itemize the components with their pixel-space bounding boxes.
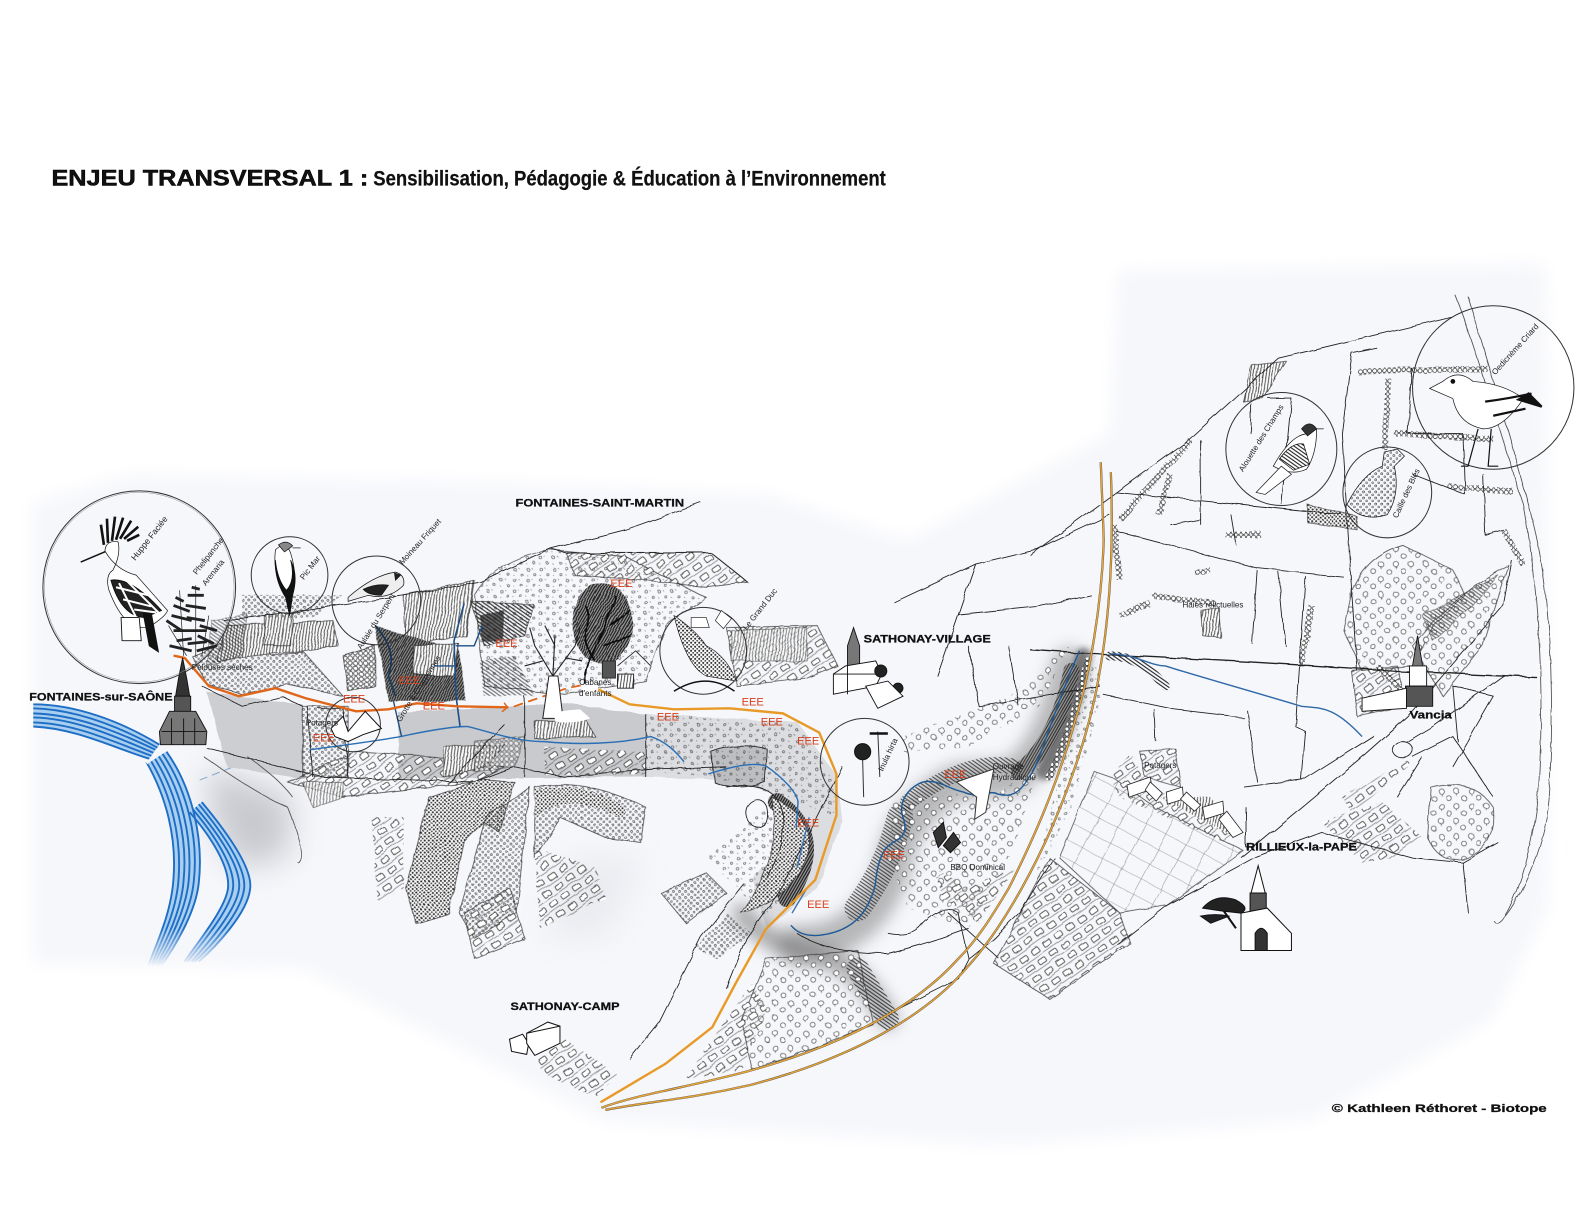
Rillieux row of buildings [1127,777,1243,837]
illustration: cypress-like tree [572,583,633,686]
EEE markers: EEE [807,899,829,911]
small labels: Grotte & Charpennes [395,654,443,724]
walking trail [175,656,836,1102]
EEE markers: EEE [343,693,365,705]
small labels: Pic Mar [298,554,322,581]
roads and field boundaries [202,317,1537,1059]
terrain shadows [207,767,646,938]
small labels: Ouvrage [993,762,1024,771]
small labels: Potagers [1144,761,1176,770]
woodpecker [275,542,301,616]
title: Sensibilisation, Pédagogie & Éducation à l’Environnement [373,166,886,191]
title: ENJEU TRANSVERSAL 1 : [51,166,368,191]
circle: Moineau Friquet [332,556,421,645]
EEE markers: EEE [423,700,445,712]
hedges [1114,369,1523,691]
small labels: Inula hirta [876,736,900,773]
church: Fontaines-sur-Saône [159,658,207,745]
EEE markers: EEE [944,769,967,781]
small labels: Cabanes [579,678,611,687]
circle: Alouette des Champs [1226,393,1337,506]
dark ridge shading [742,656,1165,1019]
hoopoe [81,517,167,652]
small labels: Caille des Blés [1391,467,1422,519]
circle: Oedicnème Criard [1413,306,1574,469]
small labels: Hydraulique [993,773,1036,782]
illustration: children's huts [602,651,651,688]
gray valley floor [207,692,842,928]
small labels: Potagers [306,718,338,727]
small labels [129,322,1541,872]
sparrow [348,572,404,601]
church: Vancia [1362,636,1433,711]
quail [1347,449,1404,517]
dashed connection to the river [200,752,272,780]
circle: Inula hirta [820,718,909,805]
small labels: Huppe Faciée [129,514,170,562]
town labels [29,498,1453,1013]
EEE markers: EEE [610,578,633,590]
map paper background [32,264,1548,1145]
circle: Grotte des Charpennes [326,697,381,752]
circle: Pic Mar [251,537,328,616]
town labels: SATHONAY-CAMP [511,1001,620,1013]
church and tree: Rillieux-la-Pape [1201,866,1291,950]
EEE markers: EEE [797,817,819,829]
vegetation and land-use texture [192,361,1508,1098]
town labels: SATHONAY-VILLAGE [864,634,991,646]
EEE markers: EEE [797,736,819,748]
small labels: Aulaie du Serpent [355,591,397,651]
town labels: FONTAINES-SAINT-MARTIN [516,498,684,510]
stone-curlew [1430,375,1542,466]
small labels: Oedicnème Criard [1490,322,1541,377]
town labels: Vancia [1409,709,1453,721]
small labels: d'enfants [579,689,612,698]
title [51,166,886,191]
credit: © Kathleen Réthoret - Biotope [1332,1103,1547,1115]
church: Sathonay-Village [833,628,903,708]
EEE markers: EEE [495,638,518,650]
river Saône [33,704,250,966]
small labels: Le Grand Duc [741,587,779,632]
hydraulic structure [956,769,994,819]
EEE markers [313,578,967,911]
small labels: Haies rélictuelles [1182,600,1243,609]
tall Rhône-side road [1455,295,1552,923]
EEE markers: EEE [657,711,679,723]
owl [674,610,737,691]
illustration: white tree [525,626,598,722]
EEE markers: EEE [742,696,764,708]
blue streams [310,603,1362,936]
small labels: Arenaria [200,558,226,587]
plant: Phelipanche arenaria [166,585,217,656]
EEE markers: EEE [313,733,335,745]
small labels: Moineau Friquet [397,517,444,566]
small labels: Pelouses sèches [192,663,253,672]
circle: Le Grand Duc [660,607,747,694]
small labels: BBQ Dominical [950,863,1005,872]
EEE markers: EEE [761,716,783,728]
motorway [601,462,1112,1110]
EEE markers: EEE [883,850,905,862]
lark [1256,424,1324,494]
small labels: Phelipanche [191,535,226,576]
EEE markers: EEE [399,675,421,687]
circle: hoopoe [43,491,236,684]
town labels: RILLIEUX-la-PAPE [1246,842,1357,854]
buildings: Sathonay-Camp [510,1022,560,1055]
small labels: Alouette des Champs [1237,403,1286,473]
circle: Caille des Blés [1343,447,1432,538]
town labels: FONTAINES-sur-SAÔNE [29,690,173,703]
barbecue scene [933,822,961,853]
